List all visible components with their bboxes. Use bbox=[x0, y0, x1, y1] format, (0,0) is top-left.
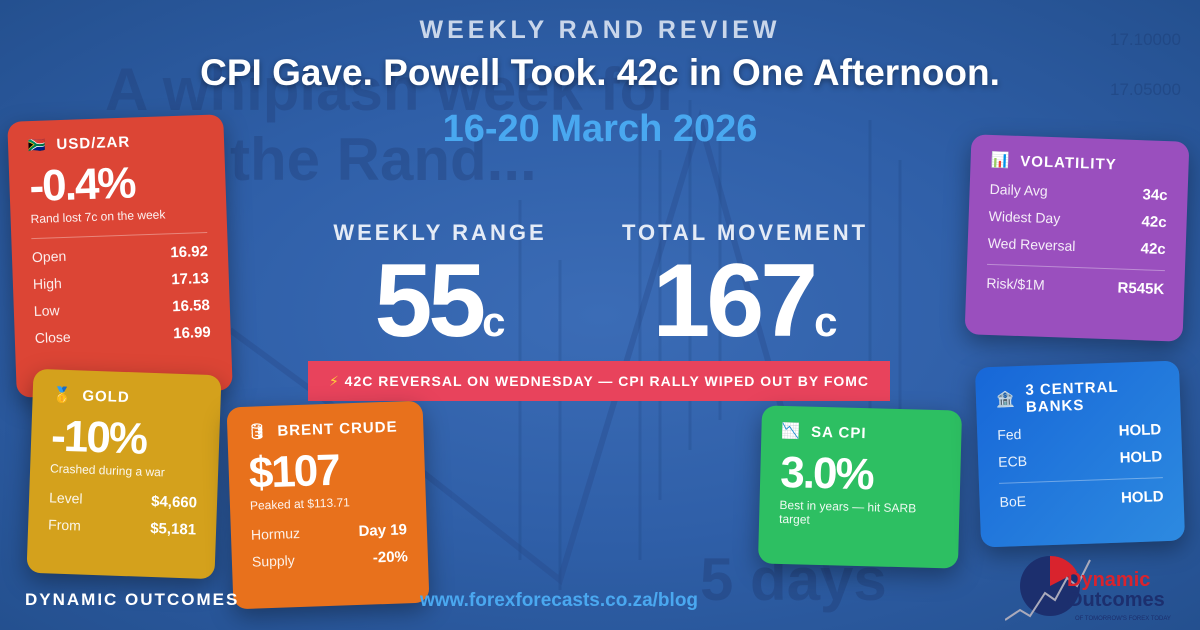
card: brent crude: Peaked at $113.71 bbox=[250, 495, 350, 513]
banner: ⚡ 42C REVERSAL ON WEDNESDAY — CPI RALLY WIPED OUT BY FOMC bbox=[329, 373, 869, 389]
card: central banks bbox=[975, 360, 1185, 548]
card: central banks: 🏦 bbox=[996, 391, 1016, 409]
card: gold: -10% bbox=[50, 411, 147, 464]
card: gold: 🥇 bbox=[52, 386, 73, 404]
card: brent crude: BRENT CRUDE bbox=[277, 418, 398, 439]
background chart: 17.10000 bbox=[1110, 30, 1181, 49]
card: central banks: 3 CENTRAL BANKS bbox=[1025, 379, 1119, 416]
card: central banks: HOLD bbox=[1121, 488, 1164, 507]
card: volatility: Wed Reversal bbox=[987, 235, 1076, 254]
logo: Outcomes bbox=[1067, 589, 1165, 611]
url: www.forexforecasts.co.za/blog bbox=[420, 590, 698, 611]
background chart: 5 days bbox=[700, 546, 887, 613]
card: brent crude: $107 bbox=[248, 446, 340, 498]
stat: weekly range: WEEKLY RANGE bbox=[333, 220, 547, 245]
card: USD/ZAR bbox=[7, 114, 233, 398]
card: central banks: BoE bbox=[999, 493, 1026, 510]
card: SA CPI: Best in years — hit SARB target bbox=[779, 498, 916, 527]
card: central banks: Fed bbox=[997, 426, 1022, 443]
card: SA CPI: SA CPI bbox=[811, 423, 867, 442]
card: gold: From bbox=[48, 516, 81, 534]
card: SA CPI: 📉 bbox=[781, 423, 801, 440]
kicker: WEEKLY RAND REVIEW bbox=[420, 16, 780, 44]
background chart: A whiplash week for bbox=[105, 56, 680, 123]
banner bbox=[308, 361, 890, 401]
date: 16-20 March 2026 bbox=[443, 108, 757, 150]
background chart: the Rand... bbox=[230, 126, 537, 193]
card: SA CPI: 3.0% bbox=[780, 448, 873, 499]
brand name: DYNAMIC OUTCOMES bbox=[25, 590, 239, 609]
card: central banks: ECB bbox=[998, 453, 1027, 470]
heading usdzar: USD/ZAR bbox=[56, 134, 130, 153]
card: USD/ZAR: High bbox=[33, 275, 62, 292]
stat: total movement: TOTAL MOVEMENT bbox=[622, 220, 868, 245]
card: volatility: R545K bbox=[1117, 279, 1165, 298]
card: gold bbox=[26, 369, 222, 579]
title: CPI Gave. Powell Took. 42c in One Afternoon. bbox=[200, 52, 1000, 93]
stat: weekly range: 55c bbox=[374, 243, 506, 359]
card: gold: $5,181 bbox=[150, 520, 196, 539]
card: USD/ZAR: 16.58 bbox=[172, 297, 210, 315]
logo: OF TOMORROW'S FOREX TODAY bbox=[1075, 616, 1171, 622]
logo: Dynamic bbox=[1067, 569, 1150, 591]
card: volatility: 42c bbox=[1140, 240, 1166, 258]
card: brent crude bbox=[227, 401, 429, 609]
card: brent crude: Hormuz bbox=[251, 525, 300, 543]
card: central banks: HOLD bbox=[1118, 421, 1161, 440]
card: USD/ZAR: Close bbox=[35, 329, 71, 346]
card: volatility: VOLATILITY bbox=[1020, 152, 1117, 173]
card: volatility: 📊 bbox=[990, 152, 1011, 170]
heading usdzar: 🇿🇦 bbox=[28, 137, 47, 153]
card: USD/ZAR: Rand lost 7c on the week bbox=[30, 207, 166, 226]
card: USD/ZAR: 17.13 bbox=[171, 270, 209, 288]
card: gold: Crashed during a war bbox=[50, 461, 165, 479]
card: brent crude: -20% bbox=[373, 548, 408, 566]
card: volatility: 34c bbox=[1142, 186, 1168, 204]
stat: weekly range bbox=[333, 220, 547, 359]
stat: total movement bbox=[622, 220, 868, 359]
card: brent crude: Supply bbox=[252, 552, 295, 570]
card: gold: GOLD bbox=[82, 387, 130, 406]
card: USD/ZAR: Low bbox=[34, 302, 60, 319]
card: USD/ZAR: -0.4% bbox=[29, 158, 135, 211]
card: USD/ZAR: Open bbox=[32, 248, 66, 265]
background chart: 17.05000 bbox=[1110, 80, 1181, 99]
card: brent crude: 🛢 bbox=[247, 423, 268, 441]
card: gold: Level bbox=[49, 489, 83, 507]
card: central banks: HOLD bbox=[1119, 448, 1162, 467]
card: volatility: Widest Day bbox=[988, 208, 1061, 226]
card: volatility: 42c bbox=[1141, 213, 1167, 231]
stat: total movement: 167c bbox=[653, 243, 837, 359]
card: USD/ZAR: 16.92 bbox=[170, 243, 208, 261]
card: gold: $4,660 bbox=[151, 493, 197, 512]
card: volatility bbox=[965, 134, 1189, 342]
card: volatility: Risk/$1M bbox=[986, 275, 1045, 293]
card: SA CPI bbox=[758, 405, 962, 569]
card: volatility: Daily Avg bbox=[989, 181, 1048, 199]
logo bbox=[1005, 556, 1171, 622]
card: USD/ZAR: 16.99 bbox=[173, 324, 211, 342]
card: brent crude: Day 19 bbox=[358, 521, 407, 540]
